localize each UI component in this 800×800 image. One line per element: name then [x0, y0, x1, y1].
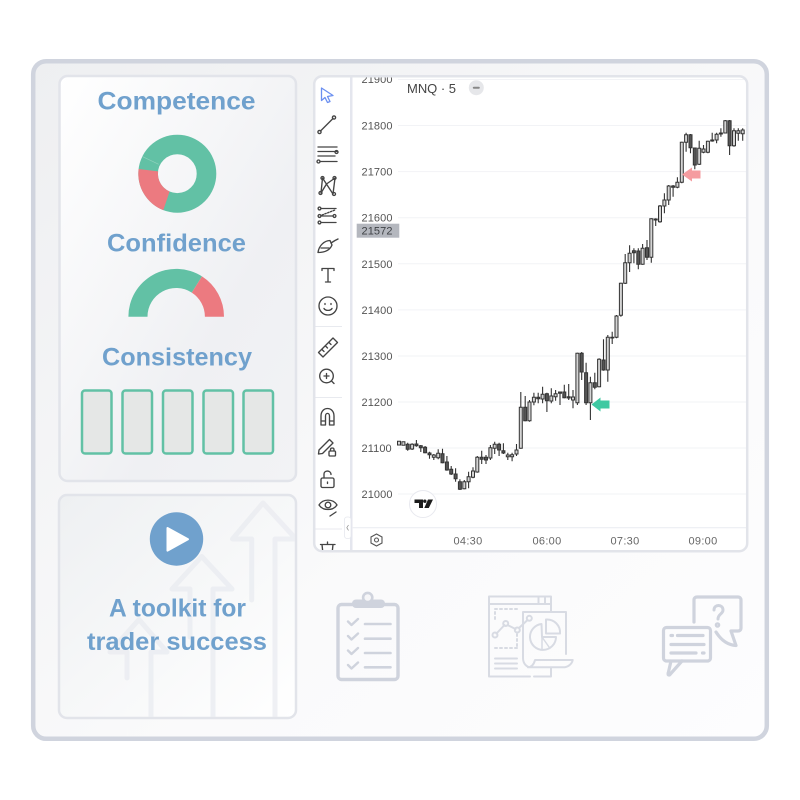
- panel: trading chart: [314, 74, 747, 554]
- price axis labels: 21800: [362, 120, 393, 132]
- icon: magnet: [321, 408, 334, 425]
- time axis: [352, 528, 746, 548]
- icon: smiley: [319, 297, 337, 315]
- icon: pattern nodes: [319, 176, 336, 196]
- panel: toolkit: [59, 495, 296, 720]
- time axis: 06:00: [532, 536, 562, 548]
- icon: text tool: [322, 268, 334, 282]
- donut chart: competence: [138, 144, 206, 210]
- text: toolkit caption: [87, 595, 267, 656]
- icon: play button: [150, 512, 203, 566]
- arrow: green entry marker: [592, 398, 610, 412]
- icon: report: [489, 596, 573, 676]
- outer panel: [33, 61, 767, 739]
- icon: chat bubbles: [664, 597, 741, 675]
- background arrows: [110, 503, 296, 720]
- price axis labels: 21600: [362, 212, 393, 224]
- heading: Confidence: Confidence: [107, 230, 246, 258]
- toolbar collapse handle: [344, 517, 351, 538]
- price axis labels: 21300: [362, 351, 393, 363]
- icon: fib tool: [318, 207, 336, 224]
- chart gridlines: [398, 80, 746, 494]
- candlestick chart: [398, 120, 744, 490]
- icon: lock: [321, 471, 334, 488]
- price axis labels: 21900: [362, 74, 393, 86]
- current price tag: [357, 224, 399, 238]
- price axis labels: [362, 74, 393, 501]
- icon: trend line: [318, 116, 336, 134]
- time axis: 04:30: [453, 536, 483, 548]
- current price tag: 21572: [362, 226, 393, 238]
- icon: eye: [319, 500, 337, 516]
- price axis labels: 21700: [362, 166, 393, 178]
- heading: Consistency: Consistency: [102, 344, 252, 372]
- icon: ruler: [318, 338, 338, 357]
- symbol label: [407, 80, 484, 96]
- symbol label: MNQ · 5: [407, 81, 456, 96]
- icon: parallel lines: [317, 147, 338, 163]
- consistency bars: [82, 390, 273, 454]
- text: toolkit caption: A toolkit for: [109, 595, 246, 623]
- price axis labels: 21500: [362, 259, 393, 271]
- icon: cursor: [322, 88, 333, 102]
- TradingView logo: [410, 490, 436, 518]
- panel: metrics: [60, 76, 296, 481]
- arrow: red exit marker: [682, 168, 700, 182]
- icon: zoom: [320, 369, 334, 384]
- price axis labels: 21100: [362, 443, 392, 455]
- time axis: 09:00: [688, 536, 718, 548]
- time axis: 07:30: [610, 536, 640, 548]
- gauge chart: confidence: [128, 269, 224, 317]
- icon: clipboard: [338, 593, 398, 680]
- text: toolkit caption: trader success: [87, 628, 267, 656]
- heading: Competence: Competence: [98, 88, 256, 116]
- icon: pencil lock: [318, 440, 336, 456]
- icon: brush: [318, 239, 338, 252]
- price axis labels: 21000: [362, 489, 393, 501]
- down candles: [406, 121, 731, 489]
- price axis labels: 21400: [362, 305, 393, 317]
- chart frame: [314, 76, 747, 551]
- toolbar separators: [315, 326, 342, 529]
- up candles: [398, 121, 744, 489]
- drawing toolbar: [315, 88, 342, 554]
- toolbar divider: [350, 77, 352, 551]
- price axis labels: 21200: [362, 397, 393, 409]
- icon: trash: [320, 541, 336, 550]
